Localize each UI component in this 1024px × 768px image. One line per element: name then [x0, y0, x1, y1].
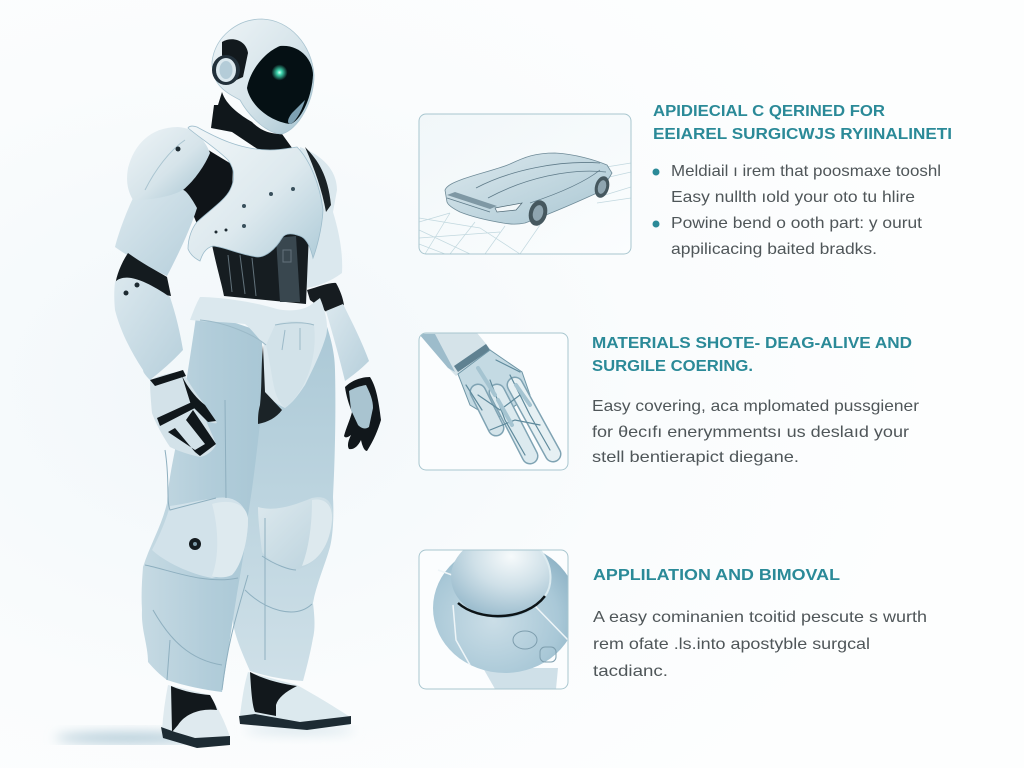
body three: rem ofate .ls.into apostyble surgcal	[593, 636, 870, 653]
sphere details	[513, 631, 556, 662]
heading one: EEIAREL SURGICWJS RYIINALINETI	[653, 126, 952, 143]
front boot	[161, 685, 230, 748]
bullet list: Powine bend o ooth part: y ourut	[671, 215, 923, 232]
heading one: APIDIECIAL C QERINED FOR	[653, 103, 885, 120]
body three: tacdianc.	[593, 663, 668, 680]
robot figure	[114, 19, 381, 748]
shoulder armour	[127, 127, 210, 200]
fingers	[466, 360, 553, 456]
sphere cap	[451, 550, 552, 618]
panel: robotic hand illustration	[419, 333, 568, 470]
left leg	[142, 310, 262, 692]
neck	[211, 92, 295, 156]
car body	[445, 153, 612, 228]
rear leg	[233, 305, 335, 681]
knee button	[189, 538, 201, 550]
panel: car illustration	[419, 114, 631, 254]
body two: Easy covering, aca mplomated pussgiener	[592, 398, 920, 415]
forearm sleeve	[114, 278, 183, 380]
bullet list: appilicacing baited bradks.	[671, 241, 877, 258]
helmet	[212, 19, 314, 134]
heading three: APPLILATION AND BIMOVAL	[593, 567, 840, 584]
wrist ring	[454, 344, 490, 372]
upper arm sleeve	[115, 190, 197, 276]
waist band and front panel	[190, 297, 327, 424]
rear boot	[239, 672, 351, 730]
heading two: SURGILE COERING.	[592, 358, 753, 375]
hand panel border	[419, 333, 568, 470]
forearm rivets	[124, 282, 140, 296]
body three	[593, 609, 927, 680]
right arm	[298, 147, 369, 381]
heading two	[592, 335, 912, 375]
text block: section one	[652, 103, 952, 258]
text block: section three	[593, 567, 927, 680]
body two: for θecıfı enerymmentsı us deslaıd your	[592, 424, 910, 441]
body two	[592, 398, 920, 466]
chest armour	[188, 126, 323, 261]
car panel border	[419, 114, 631, 254]
left elbow joint	[115, 253, 171, 296]
car ground grid	[419, 163, 631, 254]
body two: stell bentierapict diegane.	[592, 449, 799, 466]
left shoulder joint	[183, 148, 233, 224]
glowing eye	[272, 64, 288, 80]
panel: joint sphere illustration	[433, 550, 568, 688]
forearm	[419, 333, 491, 376]
floor shadow	[55, 727, 355, 743]
left hand	[150, 370, 217, 457]
text block: section two	[592, 335, 920, 466]
visor	[247, 46, 313, 124]
torso mechanics	[211, 232, 309, 304]
heading one	[653, 103, 952, 143]
visor reflection	[288, 100, 305, 124]
sphere panel border	[419, 550, 568, 689]
palm	[458, 350, 530, 420]
heading two: MATERIALS SHOTE- DEAG-ALIVE AND	[592, 335, 912, 352]
sphere	[433, 551, 568, 673]
bullet list	[652, 163, 941, 258]
lower connector	[483, 668, 558, 689]
bullet list: Meldiail ı irem that poosmaxe tooshl	[671, 163, 941, 180]
right hand	[344, 377, 381, 451]
body three: A easy cominanien tcoitid pescute s wurth	[593, 609, 927, 626]
bullet list: Easy nullth ıold your oto tu hlire	[671, 189, 915, 206]
